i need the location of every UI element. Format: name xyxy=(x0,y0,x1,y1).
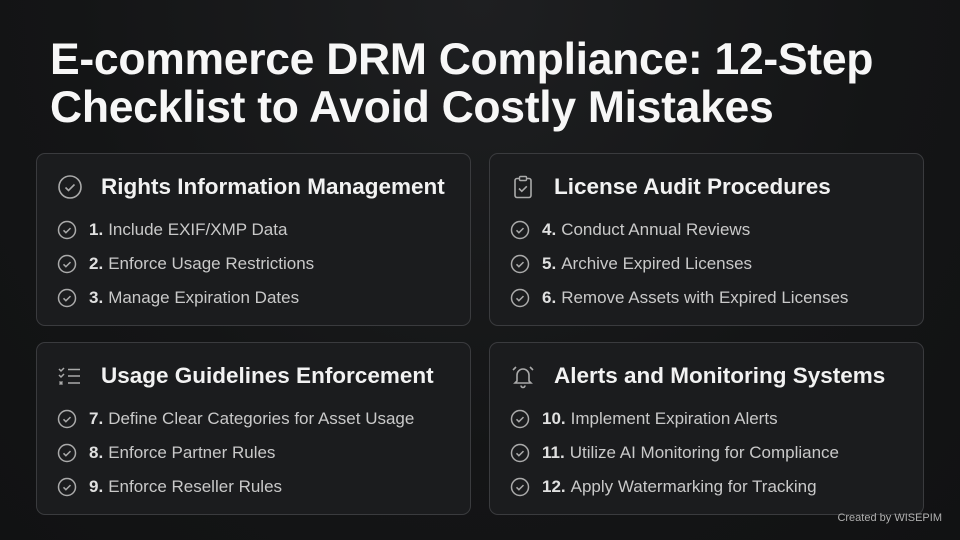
item 1: 1. xyxy=(89,220,103,239)
item 12: 12. xyxy=(542,477,566,496)
item 3: 3. xyxy=(89,288,103,307)
item 3: Manage Expiration Dates xyxy=(108,288,299,307)
item 8: Enforce Partner Rules xyxy=(108,443,275,462)
item 11: Utilize AI Monitoring for Compliance xyxy=(570,443,839,462)
item 2: 2. xyxy=(89,254,103,273)
heading: License Audit Procedures xyxy=(554,174,831,199)
title xyxy=(50,35,873,132)
item 6: Remove Assets with Expired Licenses xyxy=(561,288,848,307)
panel: usage guidelines enforcement xyxy=(36,342,471,515)
item 5: Archive Expired Licenses xyxy=(561,254,752,273)
item 12: Apply Watermarking for Tracking xyxy=(571,477,817,496)
item 2: Enforce Usage Restrictions xyxy=(108,254,314,273)
heading: Usage Guidelines Enforcement xyxy=(101,363,434,388)
item 7: Define Clear Categories for Asset Usage xyxy=(108,409,414,428)
item 4: 4. xyxy=(542,220,556,239)
item 11: 11. xyxy=(542,443,565,462)
panel: rights information management xyxy=(36,153,471,326)
heading: Alerts and Monitoring Systems xyxy=(554,363,885,388)
title: E-commerce DRM Compliance: 12-Step xyxy=(50,35,873,84)
item 10: Implement Expiration Alerts xyxy=(571,409,778,428)
panel: license audit procedures xyxy=(489,153,924,326)
item 6: 6. xyxy=(542,288,556,307)
item 1: Include EXIF/XMP Data xyxy=(108,220,287,239)
title: Checklist to Avoid Costly Mistakes xyxy=(50,83,773,132)
item 7: 7. xyxy=(89,409,103,428)
item 10: 10. xyxy=(542,409,566,428)
panel: alerts and monitoring systems xyxy=(489,342,924,515)
item 8: 8. xyxy=(89,443,103,462)
item 9: Enforce Reseller Rules xyxy=(108,477,282,496)
heading: Rights Information Management xyxy=(101,174,445,199)
item 4: Conduct Annual Reviews xyxy=(561,220,750,239)
item 9: 9. xyxy=(89,477,103,496)
item 5: 5. xyxy=(542,254,556,273)
footer credit: Created by WISEPIM xyxy=(837,512,942,524)
